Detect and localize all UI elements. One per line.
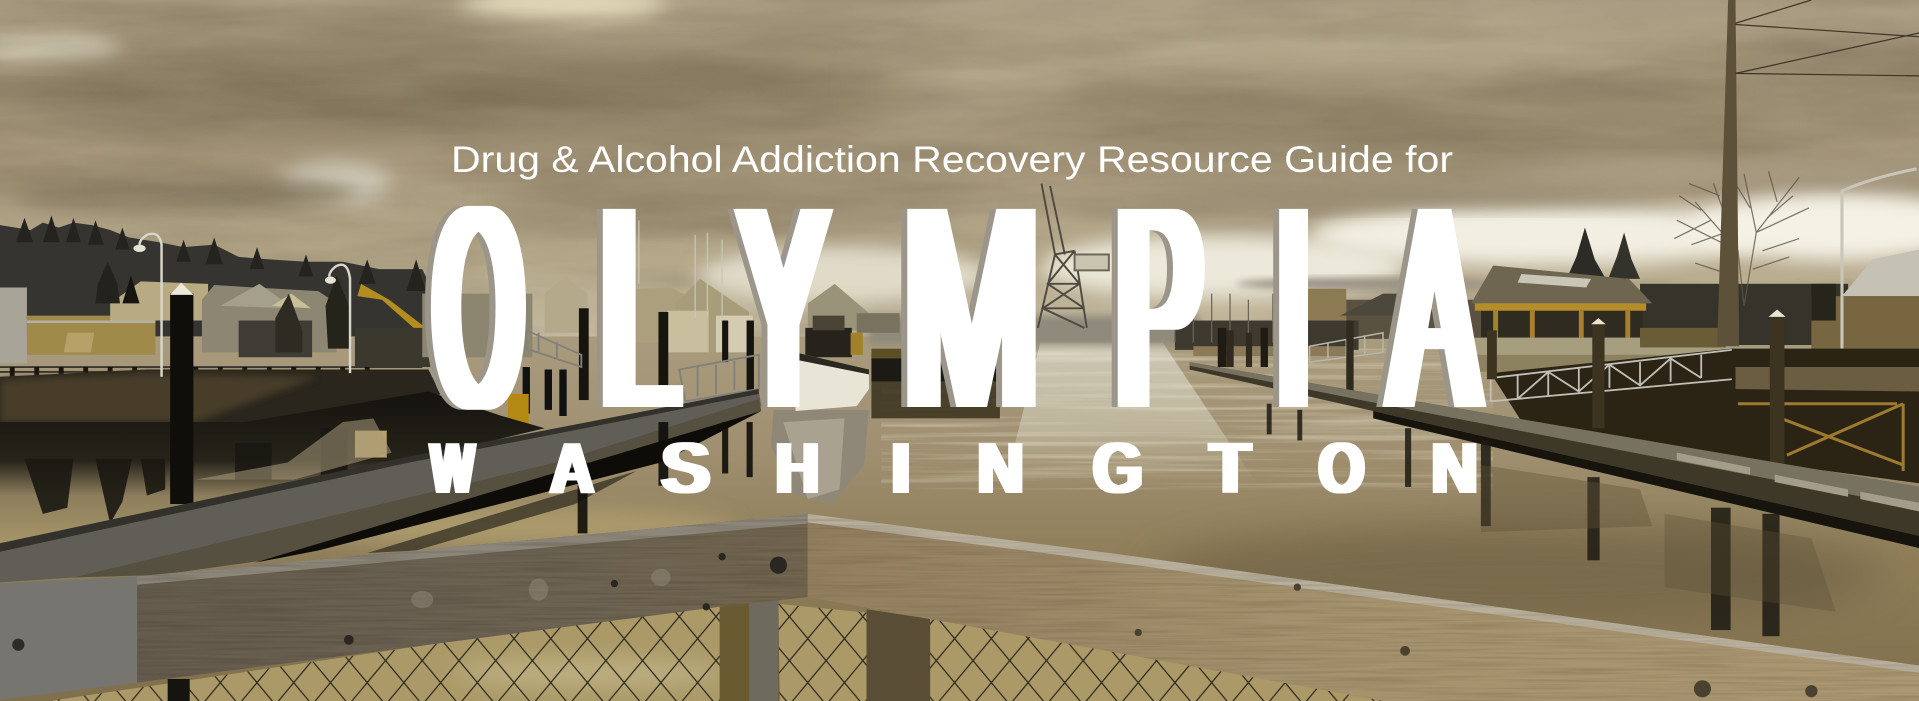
boat reflection — [578, 410, 869, 533]
title: WASHINGTON: N — [978, 427, 1024, 509]
crane — [1038, 184, 1109, 328]
subtitle: Drug & Alcohol Addiction Recovery Resource Guide for — [451, 139, 1453, 180]
title: WASHINGTON — [431, 427, 1478, 509]
left floating dock — [0, 389, 761, 582]
wooden rail left end — [0, 576, 137, 700]
title: WASHINGTON: H — [776, 429, 819, 509]
sky with clouds — [0, 0, 1919, 367]
right floating dock — [1190, 362, 1919, 548]
fence posts — [168, 599, 930, 701]
title: OLYMPIA — [436, 146, 1477, 469]
right pavilion and shore — [1469, 228, 1919, 372]
title: WASHINGTON: W — [431, 427, 475, 509]
right pier — [1226, 310, 1919, 483]
right water reflections — [1267, 404, 1836, 636]
chain link fence and water below rail — [49, 599, 1383, 701]
far shore and masts — [869, 275, 1481, 356]
title: WASHINGTON: N — [1432, 427, 1478, 509]
wooden rail right board — [808, 508, 1919, 701]
title: OLYMPIA: A — [1392, 148, 1477, 469]
title: WASHINGTON: I — [891, 428, 911, 509]
title: OLYMPIA: M — [904, 146, 1039, 469]
left shore buildings — [0, 262, 431, 379]
tall piling — [170, 283, 193, 504]
street lamp right — [1842, 169, 1917, 349]
title: OLYMPIA: O — [436, 148, 521, 469]
utility pole and wires — [1717, 0, 1919, 346]
left water reflections — [0, 391, 545, 544]
buildings behind the dock — [422, 220, 900, 431]
title: WASHINGTON: G — [1093, 427, 1143, 509]
left tree line — [0, 215, 434, 336]
boat — [796, 316, 1000, 418]
title: OLYMPIA: Y — [740, 148, 827, 469]
lamp posts left — [133, 234, 350, 377]
title: OLYMPIA: L — [602, 146, 678, 468]
left bank — [0, 369, 441, 447]
title: WASHINGTON: O — [1319, 428, 1364, 509]
title: WASHINGTON: T — [1210, 427, 1251, 509]
harbor water — [0, 336, 1919, 701]
wooden rail left board — [137, 508, 820, 691]
title: WASHINGTON: A — [550, 428, 594, 509]
title: OLYMPIA: I — [1280, 148, 1307, 469]
title: WASHINGTON: S — [661, 428, 710, 509]
dock pilings center — [1218, 328, 1268, 367]
bare tree — [1674, 171, 1809, 306]
title: OLYMPIA: P — [1117, 148, 1201, 469]
